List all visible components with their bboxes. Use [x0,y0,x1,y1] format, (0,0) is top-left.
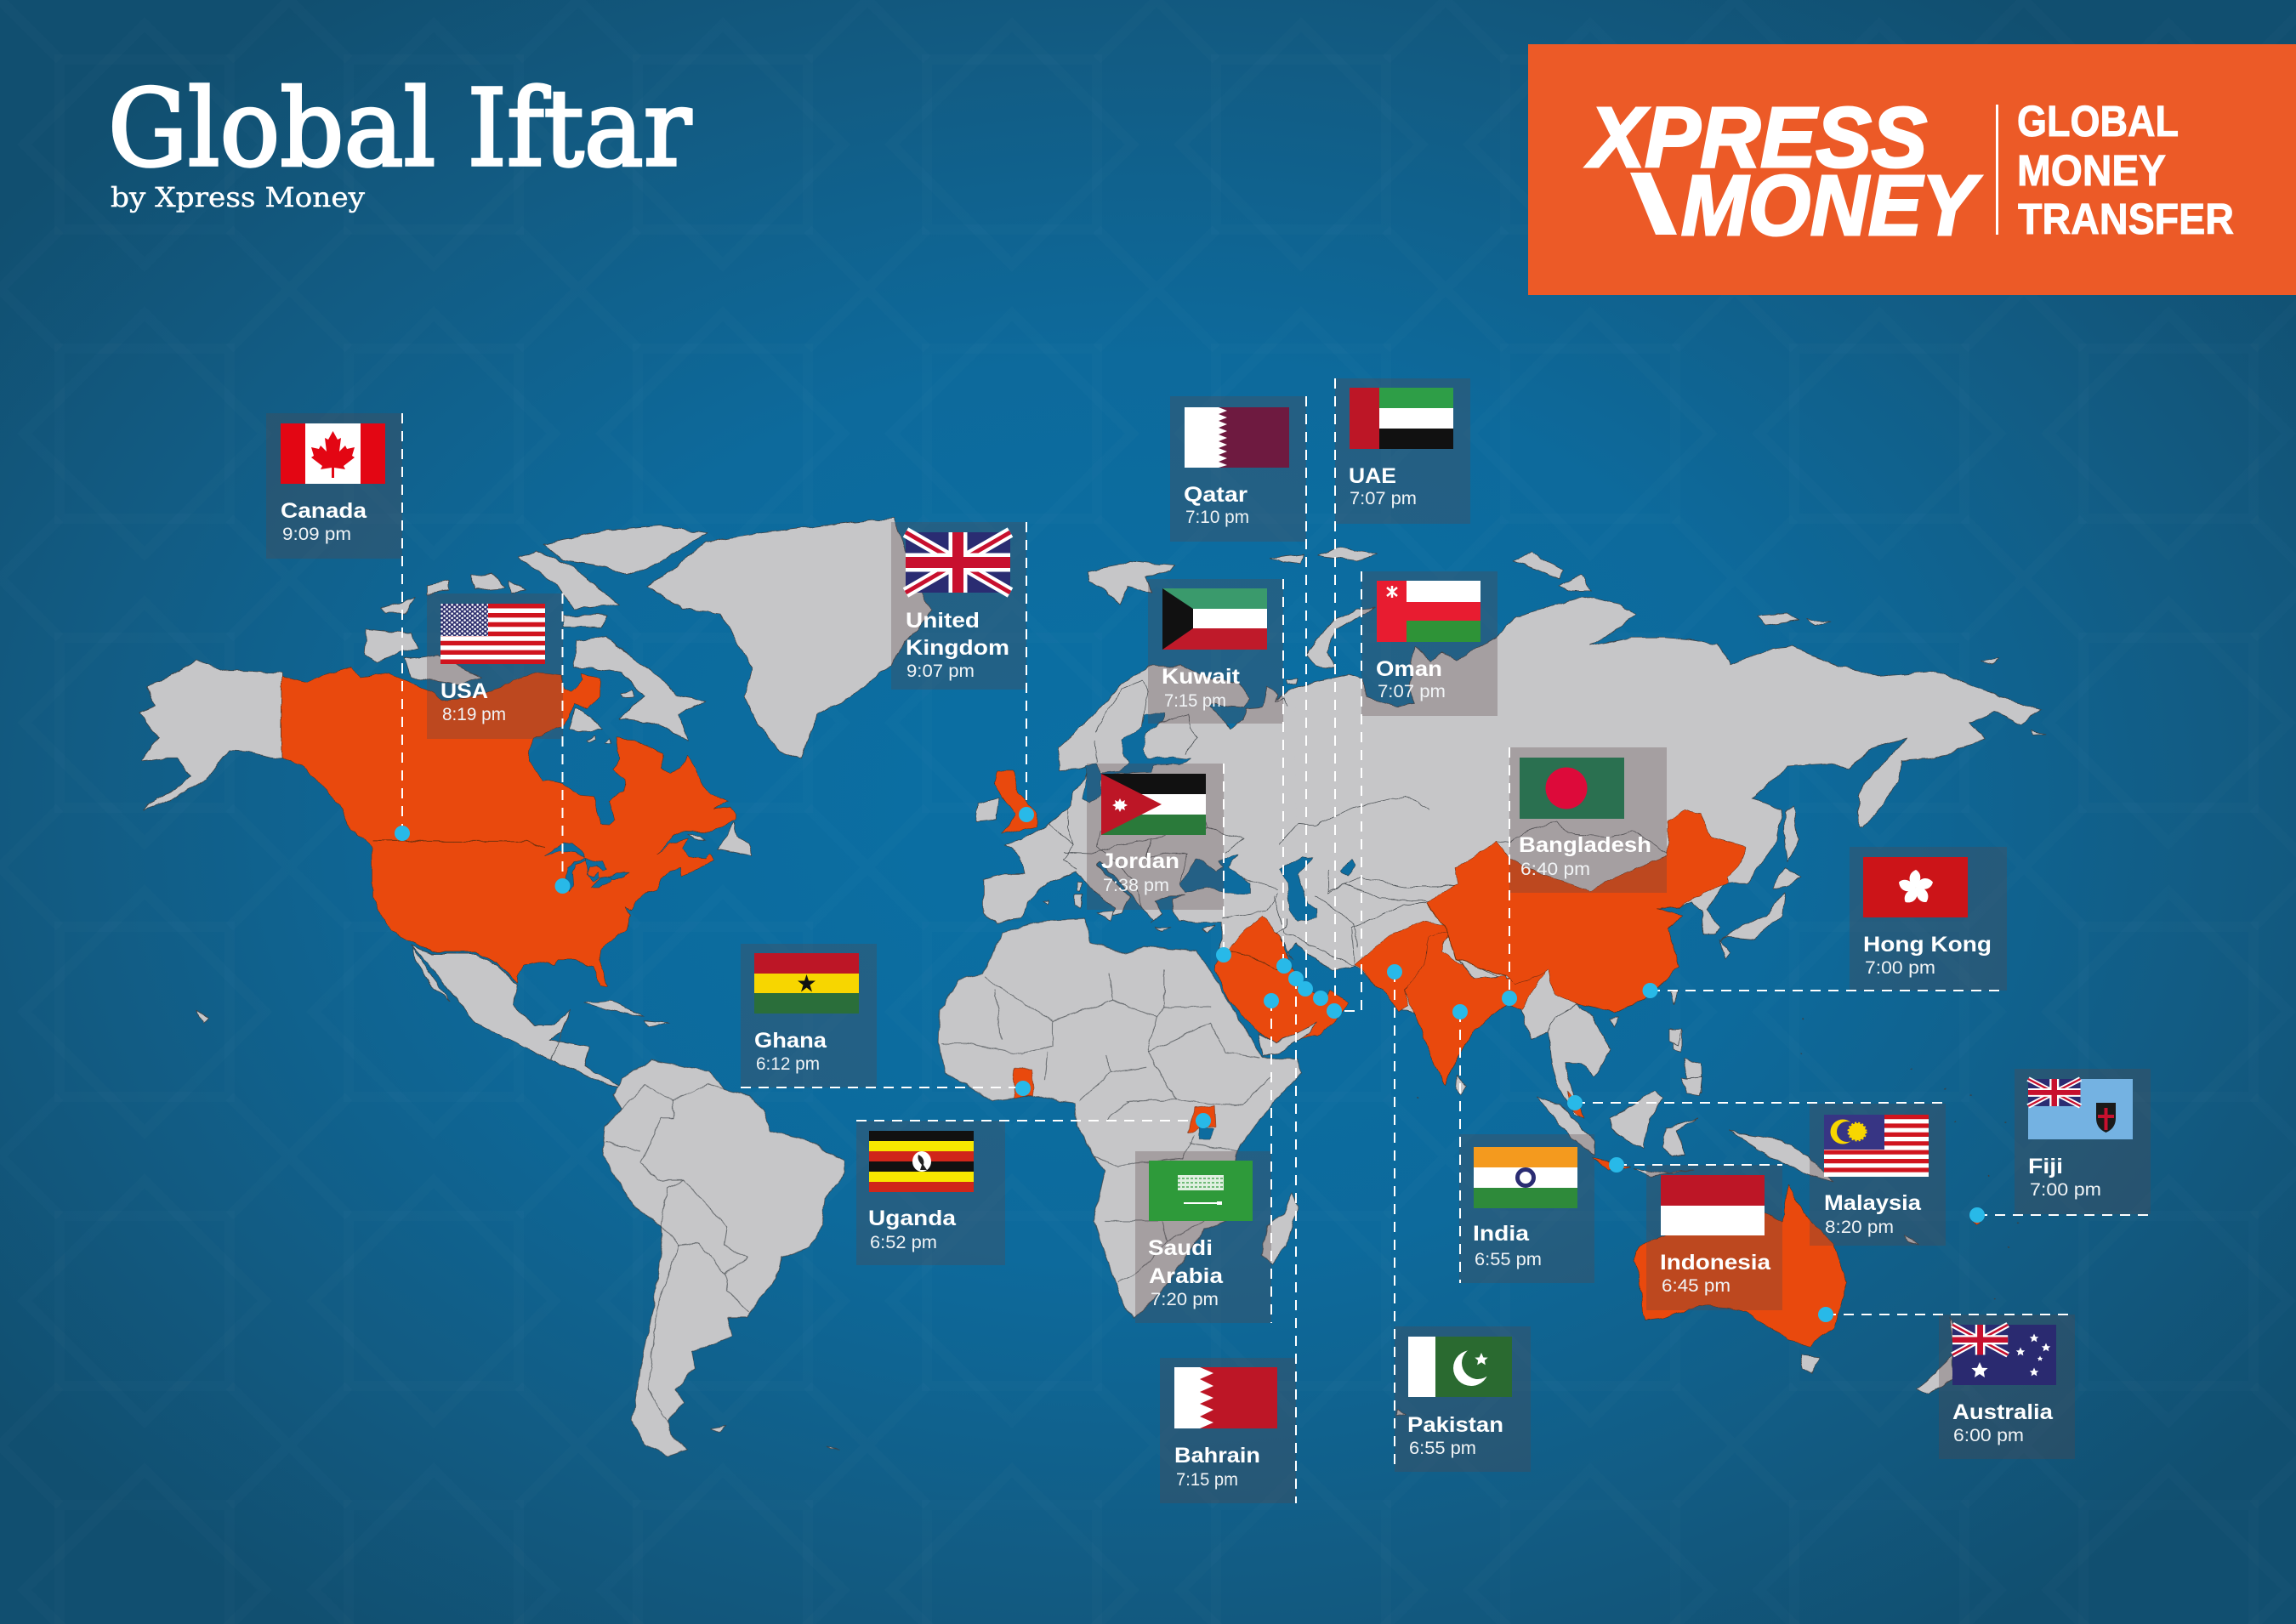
label: India time [1473,1222,1542,1269]
label: Malaysia time: Malaysia [1824,1191,1922,1215]
flag: Saudi Arabia [1149,1161,1253,1221]
label: Saudi Arabia time: 7:20 pm [1151,1290,1219,1309]
East Asia and islands [1425,552,2045,1176]
panel: Qatar [1170,396,1306,542]
flag: Qatar [1185,407,1289,468]
panel: Hong Kong [1850,847,2007,991]
label: Kuwait time [1162,665,1241,711]
label: UAE time: 7:07 pm [1350,489,1417,508]
flag: Indonesia [1661,1175,1765,1235]
logo wordmark: GLOBAL [2017,97,2179,145]
label: Kuwait time: 7:15 pm [1164,691,1226,711]
flag: Uganda [869,1131,974,1192]
logo banner [1528,44,2296,295]
label: Ghana time: Ghana [754,1029,827,1053]
label: United Kingdom time [906,609,1009,681]
label: Uganda time: Uganda [868,1207,957,1230]
label: Australia time: Australia [1952,1400,2054,1424]
label: United Kingdom time: 9:07 pm [906,662,975,681]
flag: UAE [1350,388,1453,449]
label: Ghana time: 6:12 pm [756,1054,820,1074]
logo wordmark: MONEY [2017,146,2166,195]
flag: Pakistan [1408,1337,1512,1397]
label: India time: India [1473,1222,1530,1246]
panel: Bahrain [1160,1358,1296,1503]
label: Uganda time: 6:52 pm [870,1233,937,1252]
label: Australia time: 6:00 pm [1953,1426,2024,1445]
flag: Oman [1377,581,1480,642]
label: Pakistan time: Pakistan [1407,1413,1503,1437]
flag: Fiji [2028,1079,2133,1139]
label: Fiji time: 7:00 pm [2030,1180,2101,1200]
logo wordmark: TRANSFER [2018,195,2234,243]
panel: Oman [1361,571,1498,716]
Canada and USA [281,667,759,986]
panel: Australia [1939,1315,2075,1459]
logo wordmark: MONEY [1681,158,1982,253]
subtitle: by Xpress Money [111,181,365,213]
label: Bangladesh time: 6:40 pm [1520,860,1590,879]
panel: Pakistan [1395,1326,1531,1472]
panel: Malaysia [1810,1104,1946,1246]
label: USA time: 8:19 pm [442,705,506,724]
label: Oman time [1376,657,1446,701]
panel: Bangladesh [1509,747,1667,893]
panel: UAE [1335,378,1470,524]
label: Bahrain time [1174,1444,1260,1490]
label: Fiji time [2028,1155,2101,1200]
label: Jordan time: 7:38 pm [1103,876,1169,895]
label: USA time [440,679,506,724]
label: Oman time: Oman [1376,657,1442,681]
panel: Jordan [1087,764,1224,910]
label: Malaysia time [1824,1191,1922,1237]
label: Indonesia time [1660,1251,1771,1296]
Europe [983,547,1429,961]
label: Oman time: 7:07 pm [1378,682,1446,701]
label: Hong Kong time [1863,933,1992,978]
panel: Kuwait [1148,579,1283,724]
label: Indonesia time: Indonesia [1660,1251,1771,1275]
world map [139,519,2045,1456]
Asia [1263,596,2041,1116]
flag: Kuwait [1162,588,1267,650]
logo wordmark [1585,90,2234,253]
flag: USA [440,604,545,664]
flag: Bahrain [1174,1367,1277,1428]
label: Qatar time [1184,483,1249,527]
panel: India [1459,1134,1594,1283]
label: Indonesia time: 6:45 pm [1662,1276,1731,1296]
South America and Africa [602,919,1302,1456]
label: Fiji time: Fiji [2028,1155,2063,1178]
label: Qatar time: 7:10 pm [1185,508,1249,527]
panel: Canada [266,413,402,559]
label: Jordan time [1101,849,1179,895]
label: Bahrain time: Bahrain [1174,1444,1260,1468]
flag: Hong Kong [1863,857,1968,917]
label: Canada time: Canada [281,499,367,523]
label: India time: 6:55 pm [1475,1250,1542,1269]
flag: Canada [281,423,385,484]
panel: Fiji [2015,1069,2151,1214]
label: Australia time [1952,1400,2054,1445]
flag: Australia [1952,1325,2056,1385]
label: Bangladesh time [1519,833,1651,879]
label: Canada time: 9:09 pm [282,525,351,544]
panel: Uganda [856,1121,1005,1265]
label: Kuwait time: Kuwait [1162,665,1241,689]
label: Jordan time: Jordan [1101,849,1179,873]
label: UAE time [1349,464,1417,508]
title: Global Iftar [108,67,691,190]
label: United Kingdom time: United [906,609,980,633]
label: USA time: USA [440,679,488,703]
label: Pakistan time [1407,1413,1503,1458]
label: Hong Kong time: 7:00 pm [1865,958,1935,978]
logo wordmark: XPRESS [1585,90,1927,185]
label: Saudi Arabia time: Arabia [1149,1264,1224,1288]
flag: Jordan [1101,774,1206,835]
flag: Malaysia [1824,1115,1929,1177]
South Asia and Arabia [976,771,1667,1085]
location markers [395,807,1985,1322]
flag: Bangladesh [1520,758,1624,819]
flag: Ghana [754,953,859,1014]
label: Hong Kong time: Hong Kong [1863,933,1992,957]
label: Uganda time [868,1207,957,1252]
label: Canada time [281,499,367,544]
panel: Ghana [741,944,877,1087]
panel: USA [427,593,563,739]
leader lines [402,378,2151,1503]
label: United Kingdom time: Kingdom [906,636,1009,660]
label: Malaysia time: 8:20 pm [1825,1218,1894,1237]
label: Saudi Arabia time: Saudi [1148,1236,1213,1260]
label: Pakistan time: 6:55 pm [1409,1439,1476,1458]
label: UAE time: UAE [1349,464,1396,488]
panel: United Kingdom [891,522,1026,690]
Australasia [1398,1019,2019,1416]
panel: Indonesia [1646,1165,1782,1310]
Alaska, Arctic Canada, Greenland, Mexico [139,519,932,1087]
label: Bahrain time: 7:15 pm [1176,1470,1238,1490]
panel: Saudi Arabia [1135,1151,1271,1323]
label: Bangladesh time: Bangladesh [1519,833,1651,857]
flag: India [1474,1147,1577,1208]
label: Ghana time [754,1029,827,1074]
flag: United Kingdom [906,532,1010,593]
label: Saudi Arabia time [1148,1236,1224,1309]
label: Qatar time: Qatar [1184,483,1247,507]
